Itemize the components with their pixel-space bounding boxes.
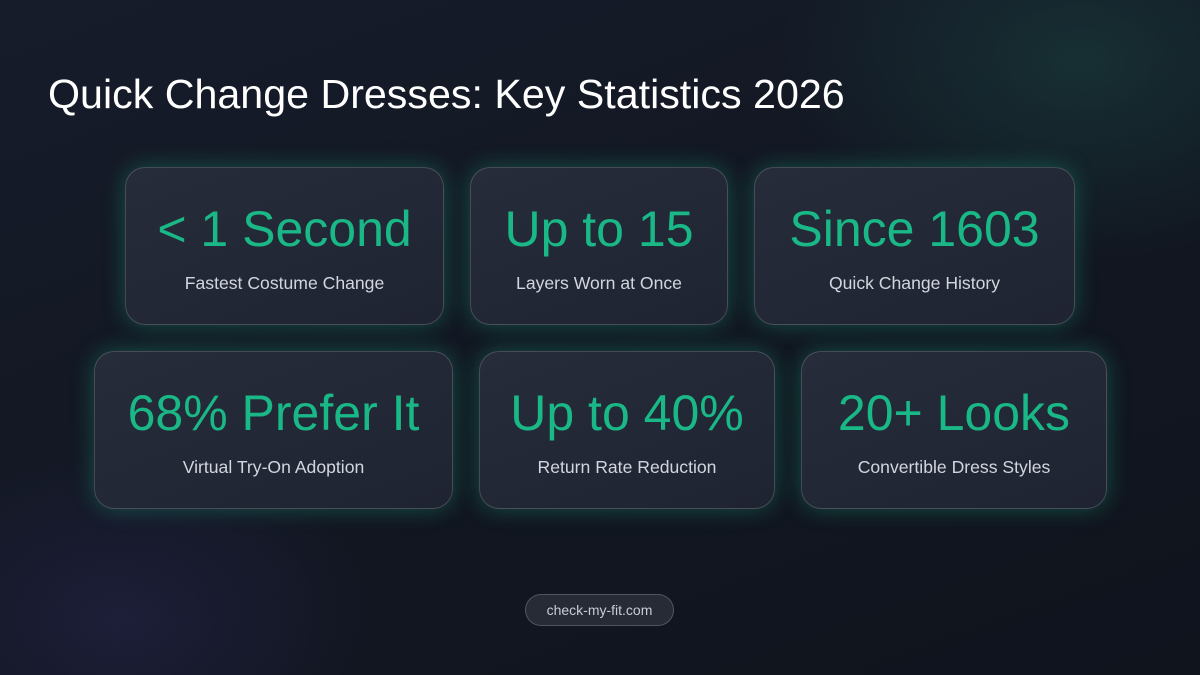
footer pill xyxy=(525,594,674,626)
card: virtual try-on: 68% Prefer It xyxy=(128,385,419,441)
card: return rate: Return Rate Reduction xyxy=(538,457,716,477)
card: layers: Up to 15 xyxy=(504,201,694,257)
card: looks: Convertible Dress Styles xyxy=(858,457,1050,477)
card: looks: 20+ Looks xyxy=(838,385,1070,441)
card: layers: Layers Worn at Once xyxy=(516,273,682,293)
footer pill: check-my-fit.com xyxy=(547,602,652,618)
card: layers xyxy=(470,167,728,325)
card: history: Quick Change History xyxy=(829,273,1000,293)
card: return rate xyxy=(479,351,775,509)
card: virtual try-on xyxy=(94,351,453,509)
card: looks xyxy=(801,351,1107,509)
title: Quick Change Dresses: Key Statistics 2026 xyxy=(48,71,845,117)
card: history xyxy=(754,167,1075,325)
card: virtual try-on: Virtual Try-On Adoption xyxy=(183,457,364,477)
card: fastest change: Fastest Costume Change xyxy=(185,273,384,293)
card: return rate: Up to 40% xyxy=(510,385,744,441)
card: fastest change xyxy=(125,167,444,325)
card: history: Since 1603 xyxy=(789,201,1040,257)
card: fastest change: < 1 Second xyxy=(157,201,412,257)
